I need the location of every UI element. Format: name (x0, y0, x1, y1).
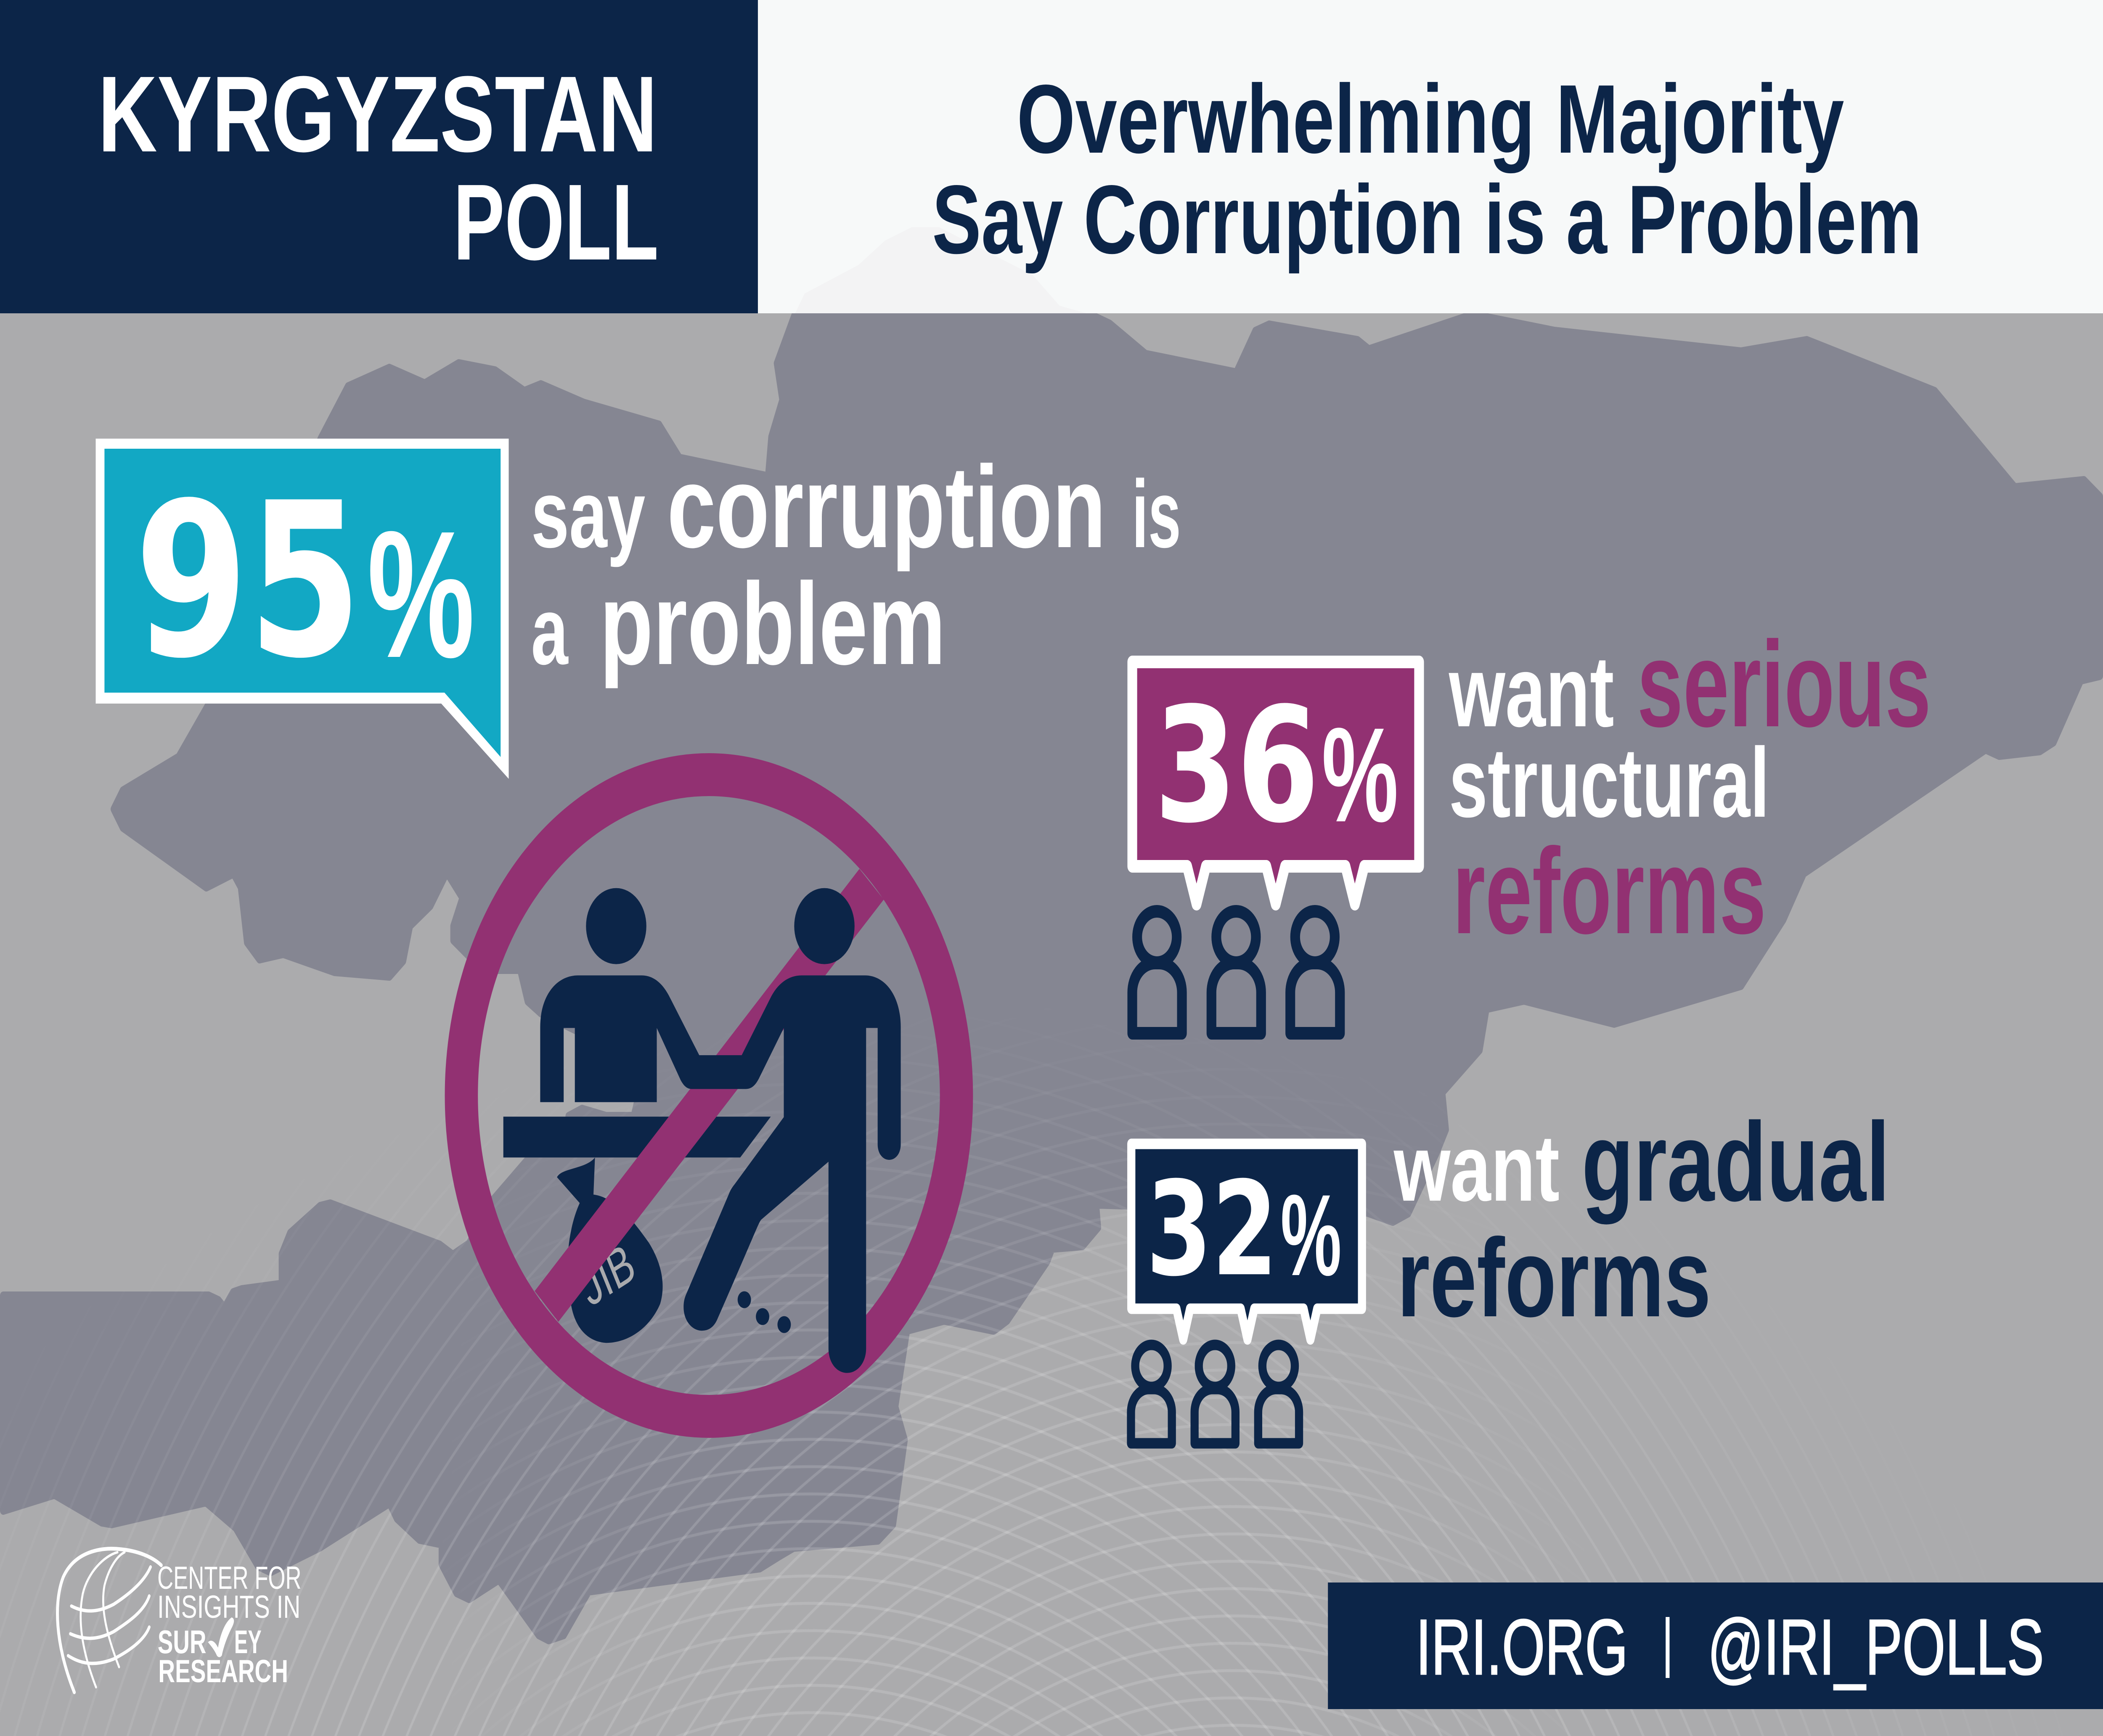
callout: 95% (96, 439, 509, 779)
header: left panel (0, 0, 758, 313)
callout: 36% (1132, 662, 1419, 904)
callout: 32%: % (1281, 1171, 1342, 1300)
icon: no bribery sign (461, 775, 956, 1416)
footer bar: @IRI_POLLS (1708, 1604, 2044, 1691)
text: say corruption is a problem: a (531, 578, 569, 685)
text: want gradual reforms: gradual (1581, 1099, 1890, 1225)
logo globe (58, 1549, 161, 1692)
logo: Center for Insights in Survey Research: CENTER FOR (157, 1561, 302, 1596)
title: POLL (453, 161, 659, 283)
callout: 95%: % (367, 493, 475, 696)
logo check mark (208, 1617, 234, 1657)
footer bar (1328, 1583, 2103, 1709)
dots (738, 1291, 791, 1333)
wave mesh pattern (172, 1106, 1692, 1736)
headline: Say Corruption is a Problem (932, 164, 1922, 274)
text: say corruption is a problem: say (531, 461, 645, 568)
text: want gradual reforms (1393, 1099, 1890, 1340)
text: want gradual reforms: reforms (1397, 1216, 1711, 1340)
head: right person (794, 888, 855, 964)
title: KYRGYZSTAN (98, 53, 657, 175)
text: say corruption is a problem (531, 442, 1181, 689)
headline (932, 64, 1922, 274)
title (98, 53, 659, 283)
head: left person (586, 888, 646, 964)
logo: Center for Insights in Survey Research: EY (234, 1623, 262, 1660)
map of Kyrgyzstan (3, 313, 2100, 1640)
figures: two people shaking hands (540, 975, 901, 1373)
header: right panel (758, 0, 2103, 313)
callout: 32% (1131, 1144, 1362, 1339)
icon: three people (32%) (1131, 1345, 1299, 1443)
money bag (557, 1157, 662, 1343)
text: want gradual reforms: want (1393, 1115, 1560, 1221)
logo: Center for Insights in Survey Research: RESEARCH (158, 1654, 288, 1689)
callout: 95%: 95 (135, 457, 362, 705)
table (503, 1117, 771, 1157)
slash (535, 869, 884, 1322)
logo: Center for Insights in Survey Research (58, 1549, 302, 1692)
logo: Center for Insights in Survey Research: SUR (158, 1623, 207, 1660)
logo: Center for Insights in Survey Research: INSIGHTS IN (157, 1590, 300, 1625)
callout: 36%: 36 (1155, 674, 1319, 858)
callout: 36%: % (1322, 699, 1398, 850)
text: say corruption is a problem: corruption (667, 442, 1106, 572)
text: want serious structural reforms: structural (1449, 728, 1769, 838)
footer bar: IRI.ORG (1416, 1604, 1628, 1691)
money bag: JIB (572, 1232, 643, 1318)
text: want serious structural reforms: reforms (1452, 823, 1766, 959)
text: want serious structural reforms (1449, 616, 1931, 959)
text: want serious structural reforms: want (1449, 635, 1614, 748)
headline: Overwhelming Majority (1017, 64, 1844, 173)
text: want serious structural reforms: serious (1637, 616, 1931, 752)
text: say corruption is a problem: is (1132, 461, 1181, 568)
text: say corruption is a problem: problem (599, 559, 946, 689)
callout: 32%: 32 (1146, 1154, 1278, 1305)
icon: three people (36%) (1132, 911, 1340, 1033)
